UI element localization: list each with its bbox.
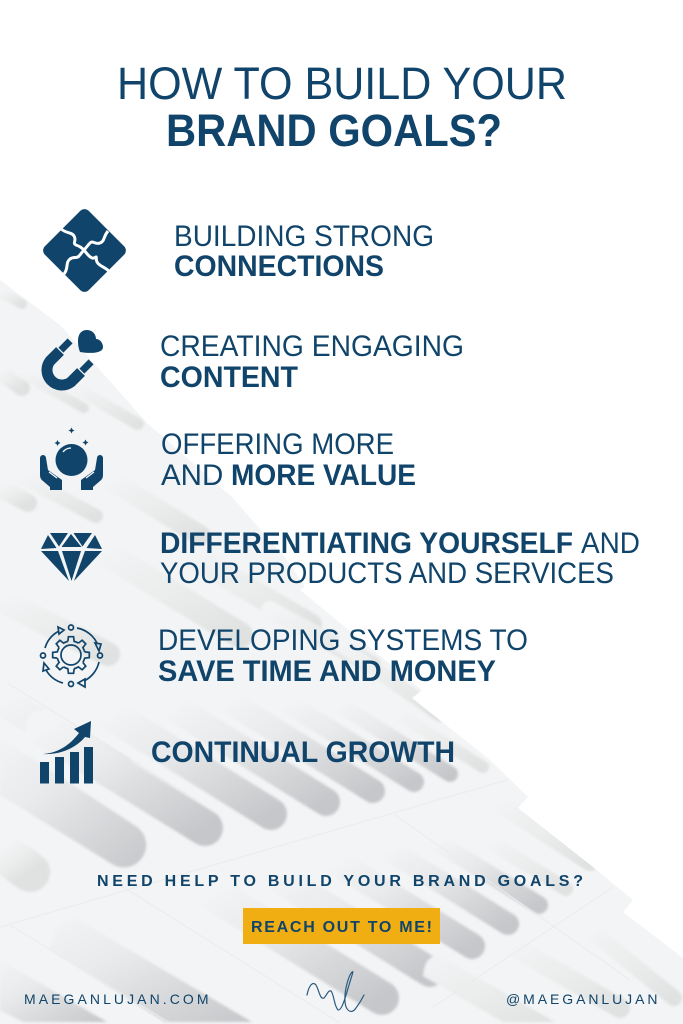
icon: diamond — [41, 533, 102, 581]
website: MAEGANLUJAN.COM — [24, 991, 208, 1007]
item 3 text: OFFERING MORE — [161, 428, 394, 461]
item 1 text — [174, 220, 434, 283]
icon: hands holding sphere — [40, 428, 103, 490]
title: HOW TO BUILD YOUR — [117, 58, 567, 109]
title: BRAND GOALS? — [166, 105, 502, 156]
icon: growth chart — [40, 721, 93, 784]
social handle: @MAEGANLUJAN — [506, 991, 658, 1007]
item 2 text: CREATING ENGAGING — [160, 330, 464, 363]
title — [117, 58, 567, 156]
icon: magnet and heart — [47, 330, 103, 385]
call to action line: NEED HELP TO BUILD YOUR BRAND GOALS? — [97, 873, 583, 890]
item 5 text — [158, 624, 528, 688]
item 4 text — [160, 527, 640, 590]
item 2 text: CONTENT — [160, 361, 298, 394]
item 4 text: DIFFERENTIATING YOURSELF — [160, 527, 573, 560]
background: building facade — [0, 270, 683, 1024]
item 5 text: SAVE TIME AND MONEY — [158, 655, 496, 688]
item 1 text: BUILDING STRONG — [174, 220, 434, 253]
button — [243, 908, 440, 944]
button: REACH OUT TO ME! — [251, 919, 432, 936]
logo signature — [307, 972, 364, 1011]
item 3 text: MORE VALUE — [231, 459, 416, 492]
item 5 text: DEVELOPING SYSTEMS TO — [158, 624, 528, 657]
item 3 text — [161, 428, 416, 492]
item 6 text: CONTINUAL GROWTH — [151, 736, 455, 769]
item 2 text — [160, 330, 464, 394]
icon: puzzle — [41, 207, 128, 294]
icon: gear with cycle arrows — [40, 625, 102, 687]
item 1 text: CONNECTIONS — [174, 250, 384, 283]
item 4 text: YOUR PRODUCTS AND SERVICES — [160, 557, 614, 590]
item 4 text: AND — [581, 527, 640, 560]
item 3 text: AND — [161, 459, 231, 492]
